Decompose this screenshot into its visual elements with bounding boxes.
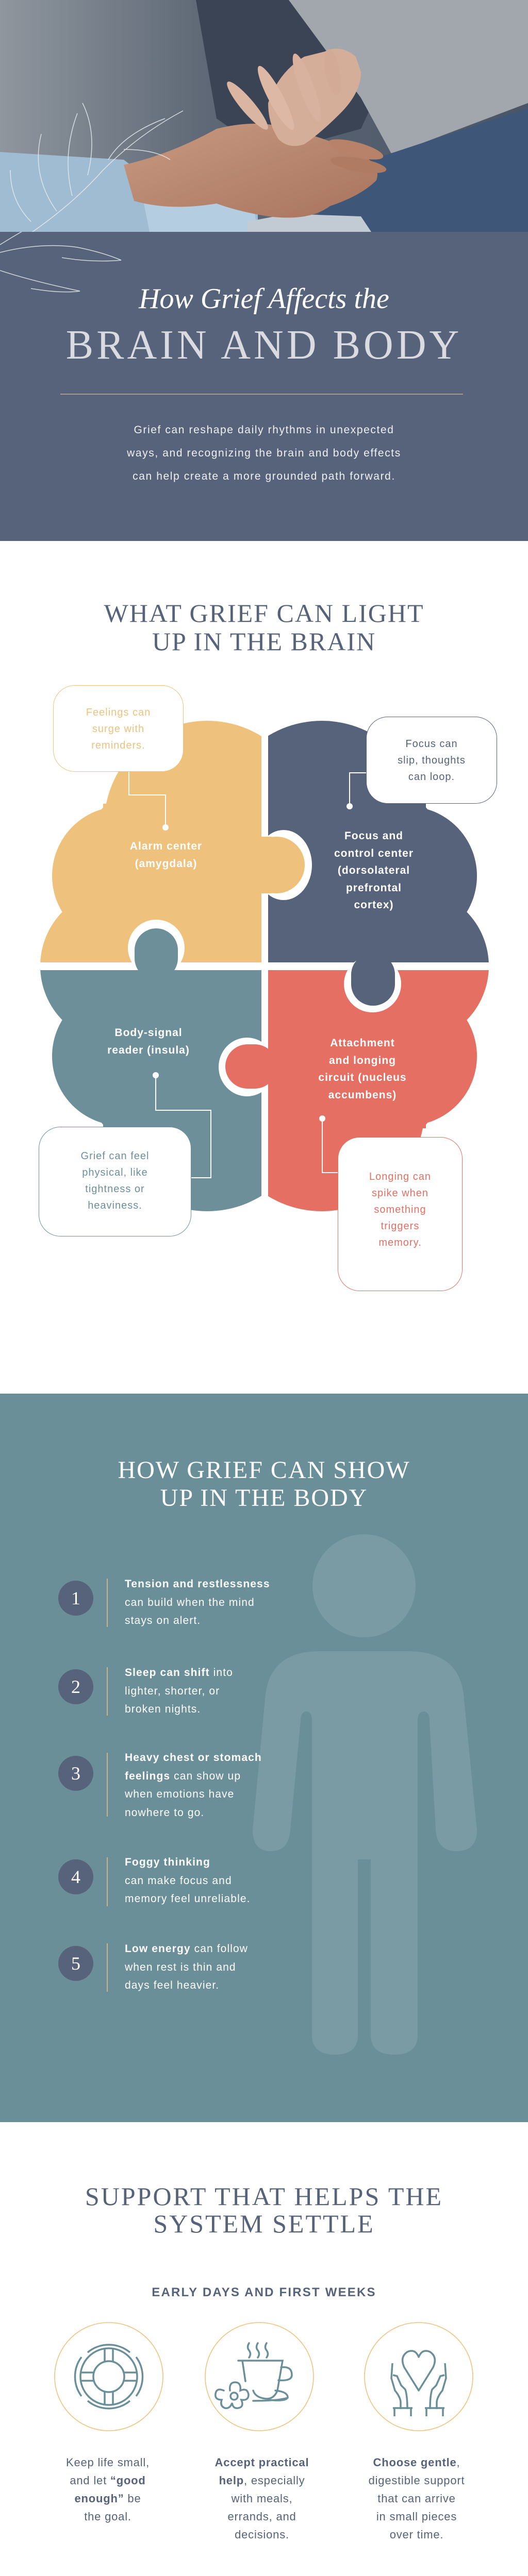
item 3: feelings can show up [125,1770,241,1782]
callout: focus: Focus can [405,738,458,750]
item 1 [58,1578,270,1627]
item 1: stays on alert. [125,1615,201,1626]
lower hand [124,124,377,217]
item 1: 1 [71,1588,80,1608]
subheading: early days: EARLY DAYS AND FIRST WEEKS [152,2285,376,2299]
label: accumbens: accumbens) [328,1089,397,1100]
icon: hands with heart [391,2351,446,2416]
support text: keep life small: enough” be [74,2492,141,2505]
label: focus center: control center [334,847,414,859]
item 5 [58,1943,248,1992]
callout: feelings: reminders. [91,740,145,751]
title band [0,232,528,541]
callout: feelings: Feelings can [86,707,151,718]
support icons [54,2322,473,2431]
connectors [129,772,366,1178]
piece: focus center [268,721,489,962]
intro text [127,424,401,482]
callout: focus: can loop. [408,771,455,783]
icon: tea cup [216,2343,292,2408]
support text: keep life small: and let “good [70,2474,146,2487]
item 1: Tension and restlessness [125,1578,270,1590]
hero photo [0,0,528,232]
brain section heading [104,599,424,656]
label: focus center: prefrontal [346,882,402,893]
label: focus center [334,830,414,911]
item 4: memory feel unreliable. [125,1893,251,1905]
support text: choose gentle: digestible support [369,2474,465,2487]
icon: lifebuoy [75,2345,143,2409]
callout: feelings [53,685,184,772]
support text: choose gentle: over time. [390,2528,443,2541]
support text: keep life small [66,2456,150,2523]
item 3: when emotions have [125,1788,234,1800]
support text: accept help: decisions. [235,2528,289,2541]
body section [0,1394,528,2122]
callout: longing: memory. [378,1237,422,1248]
item 2: Sleep can shift into [125,1667,233,1679]
callout: longing: something [374,1204,426,1215]
piece: alarm center [40,721,261,962]
callout: physical: Grief can feel [81,1150,149,1162]
brain section heading: UP IN THE BRAIN [152,627,376,656]
item 5: days feel heavier. [125,1979,219,1991]
item 4: Foggy thinking [125,1856,210,1868]
support text: keep life small: Keep life small, [66,2456,150,2469]
item 2: 2 [71,1676,80,1697]
label: focus center: (dorsolateral [338,865,410,876]
body figure [253,1534,477,2055]
body heading [118,1456,410,1512]
item 3: 3 [71,1763,80,1784]
item 3: nowhere to go. [125,1806,204,1819]
support text: accept help: errands, and [227,2510,296,2523]
callout: focus [366,717,497,804]
item 4: 4 [71,1867,80,1887]
title: How Grief Affects the [139,283,389,315]
item 5: when rest is thin and [125,1961,236,1973]
brain puzzle [40,721,489,1211]
callout: focus: slip, thoughts [398,755,466,766]
intro text: can help create a more grounded path forward. [133,470,395,482]
support text: choose gentle: that can arrive [377,2492,456,2505]
item 4 [58,1856,251,1906]
item 1: can build when the mind [125,1596,255,1608]
support text: choose gentle [369,2456,465,2541]
callout: physical: physical, like [82,1167,148,1178]
callout: longing: triggers [381,1221,419,1232]
item 2: broken nights. [125,1703,201,1715]
item 2: lighter, shorter, or [125,1685,220,1697]
callout: longing: Longing can [369,1171,431,1182]
title: BRAIN AND BODY [66,323,462,368]
leaf decoration [0,103,183,252]
item 5: 5 [71,1953,80,1974]
callout: physical: heaviness. [88,1200,142,1211]
label: alarm center: (amygdala) [135,857,197,870]
label: focus center: Focus and [344,830,403,842]
intro text: Grief can reshape daily rhythms in unexpected [134,424,394,436]
label: insula: reader (insula) [107,1044,190,1056]
label: accumbens: and longing [329,1054,396,1066]
item 3 [58,1752,262,1819]
support text: accept help: with meals, [232,2492,292,2505]
support text: accept help [215,2456,309,2541]
support heading: SYSTEM SETTLE [153,2209,375,2238]
support text: choose gentle: Choose gentle, [373,2456,460,2469]
support heading [85,2182,443,2238]
support text: accept help: Accept practical [215,2456,309,2469]
item 4: can make focus and [125,1874,232,1887]
tabs [128,830,401,1096]
title [66,283,462,368]
body heading: UP IN THE BODY [160,1484,368,1512]
body heading: HOW GRIEF CAN SHOW [118,1456,410,1484]
label: accumbens: circuit (nucleus [318,1072,407,1083]
callout: longing: spike when [372,1188,428,1199]
callout: physical [39,1127,191,1236]
label: insula: Body-signal [114,1027,183,1039]
support text: keep life small: the goal. [84,2510,131,2523]
piece: insula [40,970,261,1211]
callout: physical: tightness or [85,1183,145,1195]
label: alarm center: Alarm center [130,840,202,852]
support heading: SUPPORT THAT HELPS THE [85,2182,443,2211]
intro text: ways, and recognizing the brain and body effects [127,447,401,459]
support text: choose gentle: in small pieces [376,2510,457,2523]
support text: accept help: help, especially [219,2474,305,2487]
label: insula [107,1027,190,1056]
item 2 [58,1667,233,1716]
piece: accumbens [268,970,489,1211]
label: accumbens [318,1037,407,1100]
item 3: Heavy chest or stomach [125,1752,262,1764]
item 5: Low energy can follow [125,1943,248,1955]
label: accumbens: Attachment [330,1037,395,1049]
label: focus center: cortex) [354,899,394,911]
label: alarm center [130,840,202,870]
callout: longing [338,1137,463,1291]
brain section heading: WHAT GRIEF CAN LIGHT [104,599,424,628]
upper hand [268,48,361,146]
callout: feelings: surge with [92,723,144,735]
